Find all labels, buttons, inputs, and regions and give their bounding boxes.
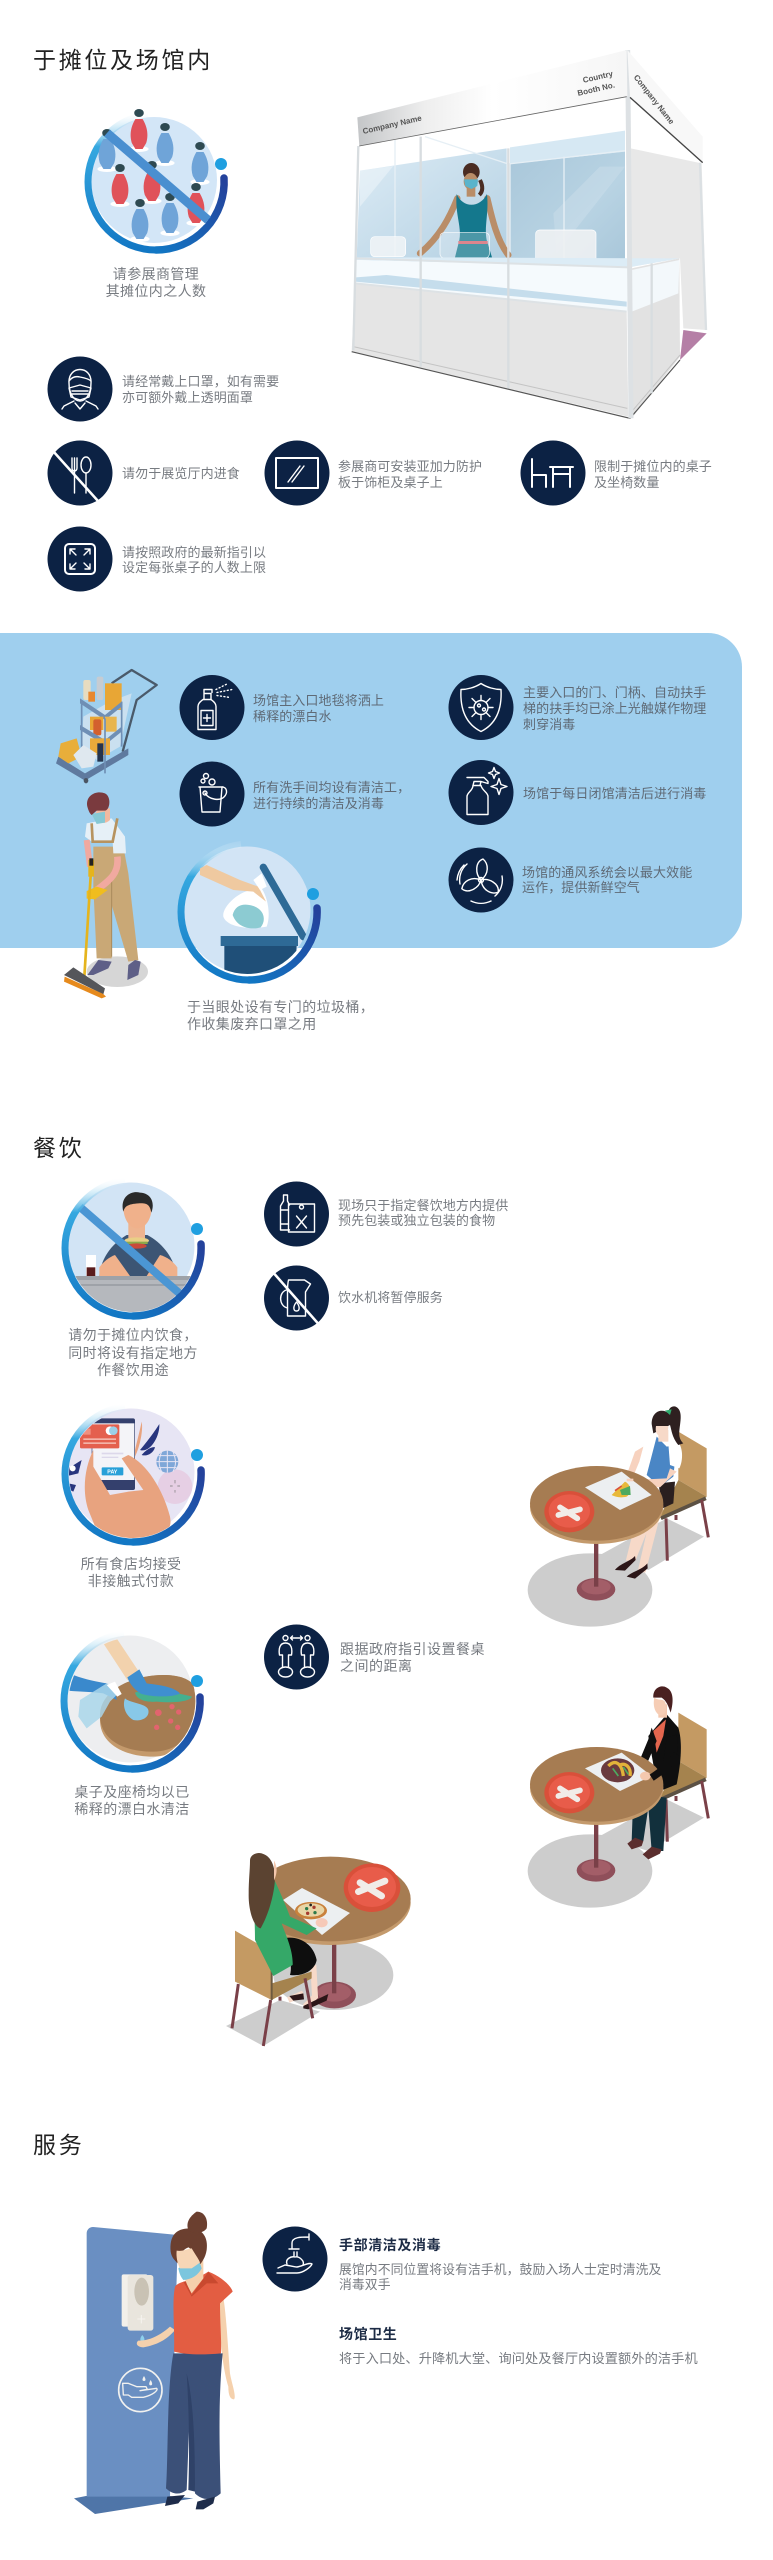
text: acrylic panel: 板于饰柜及桌子上: [338, 475, 443, 490]
booth signage: Company Name: [632, 73, 676, 127]
text: carpet bleach: [253, 693, 384, 724]
text: carpet bleach: 稀释的漂白水: [253, 709, 332, 724]
caption: mask bin: 作收集废弃口罩之用: [187, 1016, 317, 1032]
text: hand hygiene: 手部清洁及消毒: [339, 2237, 441, 2253]
booth signage: Booth No.: [577, 81, 616, 98]
icon: expand arrows: [48, 526, 112, 592]
icon: bucket: [180, 762, 244, 826]
illustration: hand sanitiser stand with woman: [74, 2212, 235, 2514]
woman in booth: [420, 163, 508, 257]
text: photocatalyst coating: 刺穿消毒: [523, 717, 575, 732]
text: photocatalyst coating: [523, 685, 706, 732]
illustration: woman in green at table: [226, 1853, 411, 2046]
caption: cashless payment: 所有食店均接受: [81, 1556, 181, 1572]
caption: mask bin: 于当眼处设有专门的垃圾桶，: [187, 999, 374, 1015]
caption: mask bin: [187, 999, 374, 1032]
text: limit furniture: 限制于摊位内的桌子: [594, 459, 712, 474]
icon: acrylic panel: [264, 440, 330, 506]
caption: table cleaning: [74, 1784, 190, 1817]
booth signage: Company Name: [362, 113, 423, 136]
text: people per table: 请按照政府的最新指引以: [122, 545, 266, 560]
illustration: man at table with crossed seat: [528, 1686, 708, 1908]
text: packaged food: 预先包装或独立包装的食物: [338, 1213, 495, 1228]
text: ventilation: 场馆的通风系统会以最大效能: [522, 865, 692, 880]
booth signage: Country: [582, 69, 614, 85]
caption: table cleaning: 稀释的漂白水清洁: [74, 1801, 190, 1817]
illustration: exhibition booth: [352, 50, 707, 418]
illustration: cleaning cart: [56, 670, 157, 783]
caption: people limit: 请参展商管理: [113, 266, 199, 282]
text: packaged food: 现场只于指定餐饮地方内提供: [338, 1198, 508, 1213]
icon: face mask: [48, 356, 112, 422]
text: wear mask: [122, 374, 279, 405]
caption: no eating at booth: [68, 1327, 198, 1378]
text: toilet cleaners: 所有洗手间均设有清洁工，: [253, 780, 410, 795]
text: people per table: 设定每张桌子的人数上限: [122, 560, 266, 575]
icon: packaged food: [264, 1182, 329, 1246]
text: venue hygiene: 将于入口处、升降机大堂、询问处及餐厅内设置额外的洁手机: [339, 2351, 698, 2366]
heading: food and beverage: 餐饮: [33, 1135, 84, 1161]
text: toilet cleaners: 进行持续的清洁及消毒: [253, 796, 384, 811]
caption: no eating at booth: 作餐饮用途: [97, 1362, 169, 1378]
icon: no eating at booth circle: [60, 1180, 207, 1319]
text: people per table: [122, 545, 266, 575]
caption: table cleaning: 桌子及座椅均以已: [74, 1784, 190, 1800]
text: hand hygiene: [339, 2237, 662, 2292]
sanitiser stand: [74, 2227, 193, 2514]
caption: people limit: [106, 266, 206, 299]
text: photocatalyst coating: 梯的扶手均已涂上光触媒作物理: [523, 701, 706, 716]
icon: table wiping circle: [60, 1634, 203, 1769]
woman using sanitiser: [137, 2212, 235, 2509]
caption: cashless payment: 非接触式付款: [88, 1573, 174, 1589]
icon: spray bottle: [180, 675, 244, 740]
text: venue hygiene: 场馆卫生: [339, 2326, 397, 2342]
caption: cashless payment: [81, 1556, 181, 1589]
text: table distance: [340, 1641, 485, 1674]
text: table distance: 跟据政府指引设置餐桌: [340, 1641, 485, 1657]
icon: no eating: [48, 440, 112, 506]
text: wear mask: 亦可额外戴上透明面罩: [122, 390, 253, 405]
text: table distance: 之间的距离: [340, 1658, 412, 1674]
caption: no eating at booth: 请勿于摊位内饮食，: [68, 1327, 198, 1343]
heading: services: 服务: [33, 2132, 84, 2158]
text: hand hygiene: 展馆内不同位置将设有洁手机，鼓励入场人士定时清洗及: [339, 2262, 662, 2277]
text: acrylic panel: [338, 459, 482, 490]
panel: blue cleaning band: [0, 633, 742, 948]
caption: people limit: 其摊位内之人数: [106, 283, 206, 299]
icon: cashless payment circle: [60, 1406, 203, 1547]
icon: mask disposal circle: [181, 844, 319, 980]
icon: spray and sparkles: [448, 760, 514, 825]
text: carpet bleach: 场馆主入口地毯将洒上: [253, 693, 384, 708]
heading: at booth and in hall: 于摊位及场馆内: [33, 47, 213, 73]
icon: ventilation fan: [448, 848, 514, 912]
icon: table and chair: [520, 440, 586, 506]
text: limit furniture: [594, 459, 712, 490]
text: limit furniture: 及坐椅数量: [594, 475, 660, 490]
text: hand hygiene: 消毒双手: [339, 2277, 391, 2292]
text: packaged food: [338, 1198, 508, 1228]
icon: people limit circle: [88, 109, 227, 250]
illustration: woman at table with crossed seat: [528, 1406, 708, 1627]
text: venue hygiene: [339, 2326, 698, 2366]
text: toilet cleaners: [253, 780, 410, 811]
text: no eating: 请勿于展览厅内进食: [122, 466, 240, 481]
icon: table distance: [264, 1624, 329, 1690]
icon: no water dispenser: [264, 1266, 329, 1330]
text: ventilation: 运作，提供新鲜空气: [522, 880, 640, 895]
text: ventilation: [522, 865, 692, 895]
text: wear mask: 请经常戴上口罩，如有需要: [122, 374, 279, 389]
illustration: cleaner with broom: [64, 792, 148, 998]
text: photocatalyst coating: 主要入口的门、门柄、自动扶手: [523, 685, 706, 700]
caption: no eating at booth: 同时将设有指定地方: [68, 1345, 198, 1361]
text: acrylic panel: 参展商可安装亚加力防护: [338, 459, 482, 474]
text: daily disinfection: 场馆于每日闭馆清洁后进行消毒: [523, 786, 706, 801]
booth signage: [362, 69, 676, 136]
icon: cashless payment circle: PAY: [107, 1469, 118, 1475]
icon: shield virus: [448, 675, 514, 740]
icon: faucet and hand: [262, 2226, 328, 2292]
text: water dispenser: 饮水机将暂停服务: [338, 1290, 443, 1305]
